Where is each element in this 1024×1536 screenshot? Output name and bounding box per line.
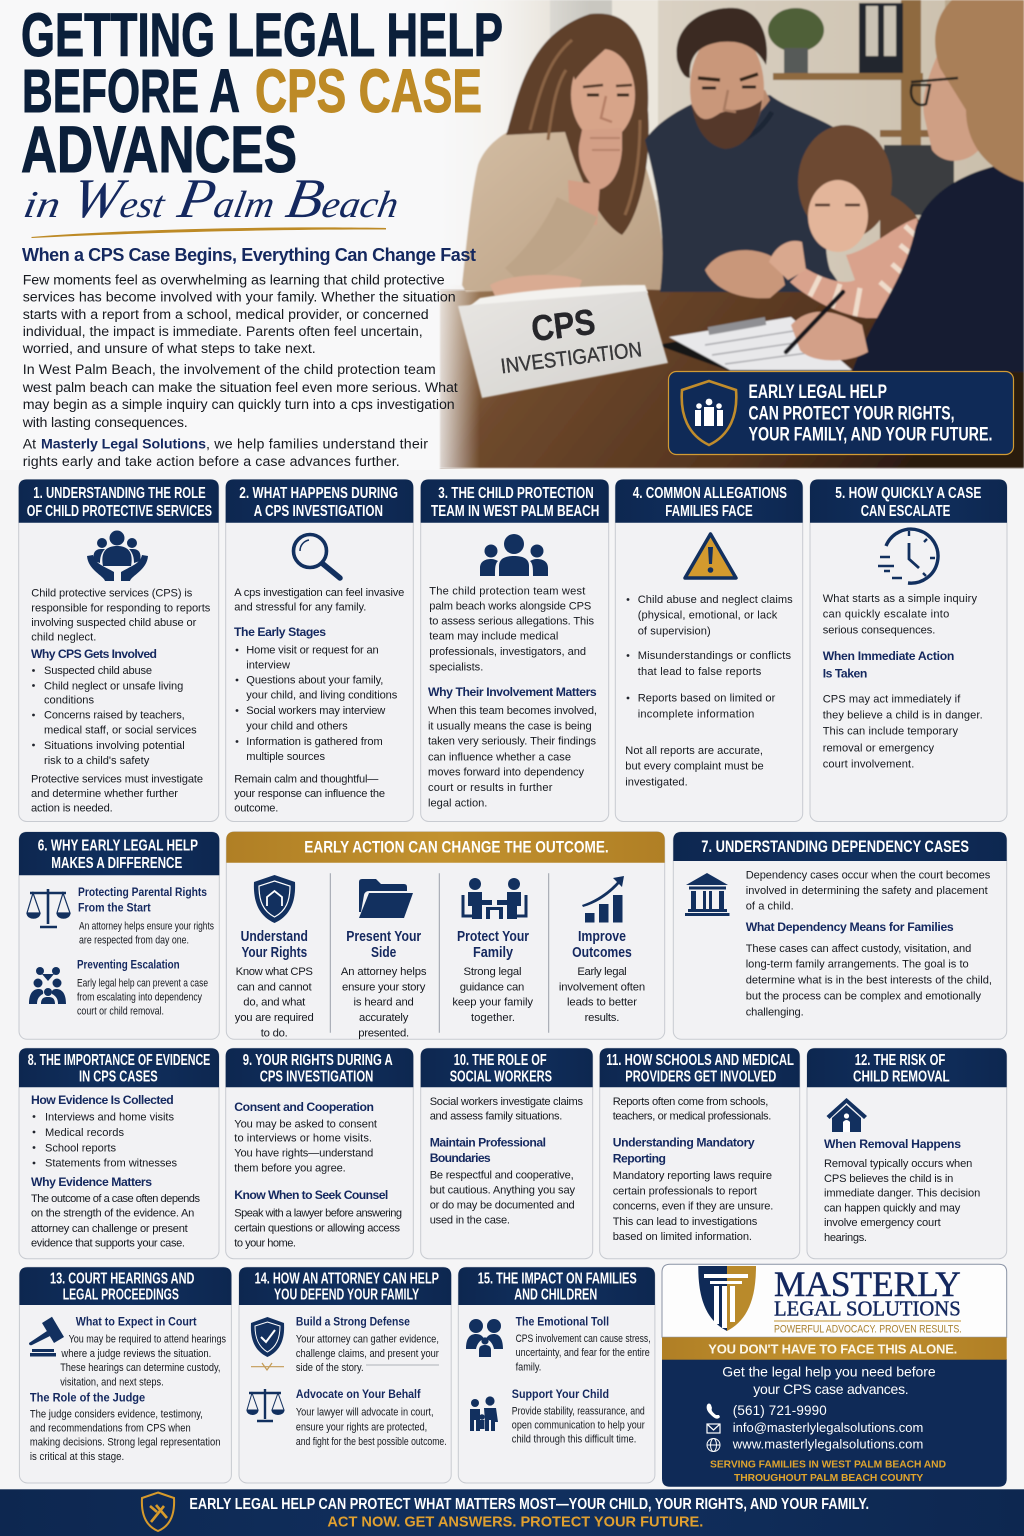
column: understand your rights: Your Rights — [241, 945, 307, 961]
panel 5: how quickly a case can escalate: court involvement. — [823, 758, 914, 770]
panel 3: the child protection team: specialists. — [429, 661, 483, 673]
column: protect your family: Strong legal — [464, 966, 522, 978]
panel 3: the child protection team: legal action. — [428, 798, 487, 810]
icon: warning triangle — [685, 534, 736, 578]
panel 9: your rights during a CPS investigation: to your home. — [234, 1238, 296, 1250]
column: present your side: is heard and — [354, 997, 414, 1009]
panel 7: understanding dependency cases: challenging. — [746, 1006, 804, 1018]
panel 4: common allegations: Reports based on limited or — [638, 693, 776, 705]
panel 7: understanding dependency cases — [673, 832, 1007, 1039]
panel 7: understanding dependency cases: involved in determining the safety and placement — [746, 885, 988, 897]
intro text: worried, and unsure of what steps to take next. — [22, 341, 316, 357]
panel 4: common allegations: investigated. — [625, 777, 688, 789]
panel 13: court hearings and legal proceedings — [19, 1267, 231, 1483]
panel 9: your rights during a CPS investigation: CPS INVESTIGATION — [260, 1069, 373, 1086]
icon: courthouse — [685, 873, 730, 916]
panel 7: understanding dependency cases: determine what is in the best interests of the child, — [746, 975, 992, 987]
contact panel: Masterly Legal Solutions: info@masterlylegalsolutions.com — [733, 1420, 923, 1435]
panel 13: court hearings and legal proceedings: The Role of the Judge — [30, 1391, 145, 1405]
contact panel: Masterly Legal Solutions: Get the legal help you need before — [722, 1364, 936, 1380]
panel 4: common allegations: 4. COMMON ALLEGATIONS — [633, 485, 787, 502]
panel 10: the role of social workers: and assess family situations. — [430, 1111, 562, 1123]
panel 5: how quickly a case can escalate: serious consequences. — [823, 625, 935, 637]
panel 10: the role of social workers: SOCIAL WORKERS — [450, 1069, 552, 1086]
panel 15: the impact on families and children — [458, 1267, 655, 1483]
panel 10: the role of social workers: used in the case. — [430, 1215, 510, 1227]
panel 1: understanding the role of CPS: 1. UNDERSTANDING THE ROLE — [33, 485, 206, 502]
panel 4: common allegations — [615, 480, 803, 822]
hero photo: worried family meeting an attorney at a table — [430, 0, 1024, 468]
panel 9: your rights during a CPS investigation: Consent and Cooperation — [234, 1100, 374, 1114]
icon: shield with family — [682, 381, 736, 445]
title: GETTING LEGAL HELP — [21, 1, 503, 69]
panel 6: why early legal help makes a difference: 6. WHY EARLY LEGAL HELP — [38, 837, 198, 854]
panel 6: why early legal help makes a difference: Early legal help can prevent a case — [77, 978, 208, 990]
intro text: west palm beach can make the situation feel even more serious. What — [22, 380, 458, 396]
panel 11: how schools and medical providers get involved: teachers, or medical professionals. — [613, 1111, 771, 1123]
intro text: services has become involved with your family. Whether the situation — [23, 290, 456, 306]
panel 1: understanding the role of CPS: action is needed. — [31, 803, 113, 815]
panel 2: what happens during a CPS investigation: interview — [246, 660, 291, 672]
panel 9: your rights during a CPS investigation: certain questions or allowing access — [234, 1223, 400, 1235]
panel 1: understanding the role of CPS: Child neglect or unsafe living — [44, 680, 183, 692]
panel 12: the risk of child removal: When Removal Happens — [824, 1137, 961, 1151]
panel 8: the importance of evidence: evidence that supports your case. — [31, 1238, 185, 1250]
panel 4: common allegations: that lead to false reports — [638, 666, 762, 678]
contact panel: Masterly Legal Solutions: (561) 721-9990 — [733, 1403, 827, 1418]
column: understand your rights: to do. — [261, 1027, 288, 1039]
panel 8: the importance of evidence: on the strength of the evidence. An — [31, 1208, 194, 1220]
panel 3: the child protection team — [421, 480, 609, 822]
script subtitle: in West Palm Beach: Beach — [282, 168, 405, 230]
title: BEFORE A — [22, 57, 240, 125]
panel 13: court hearings and legal proceedings: 13. COURT HEARINGS AND — [50, 1270, 194, 1287]
icon: house with child — [826, 1098, 867, 1132]
contact panel: Masterly Legal Solutions — [662, 1264, 1007, 1487]
panel 13: court hearings and legal proceedings: making decisions. Strong legal representation — [30, 1437, 221, 1449]
panel 1: understanding the role of CPS: Child protective services (CPS) is — [31, 588, 193, 600]
panel 13: court hearings and legal proceedings: where a judge reviews the situation. — [61, 1348, 211, 1360]
panel 10: the role of social workers: 10. THE ROLE OF — [454, 1052, 547, 1069]
panel 5: how quickly a case can escalate: CAN ESCALATE — [861, 503, 951, 520]
column: protect your family: Family — [473, 945, 513, 961]
panel 5: how quickly a case can escalate: This can include temporary — [823, 726, 958, 738]
panel 4: common allegations: but every complaint must be — [625, 761, 764, 773]
panel 2: what happens during a CPS investigation: A CPS INVESTIGATION — [254, 503, 383, 520]
column: protect your family: keep your family — [452, 997, 533, 1009]
panel 6: why early legal help makes a difference: from escalating into dependency — [77, 992, 202, 1004]
panel 8: the importance of evidence — [19, 1048, 219, 1259]
sign: CPS investigation: CPS — [529, 301, 597, 349]
panel 2: what happens during a CPS investigation: and stressful for any family. — [234, 602, 366, 614]
panel 2: what happens during a CPS investigation: outcome. — [234, 803, 278, 815]
icon: envelope — [707, 1424, 720, 1433]
title — [21, 1, 503, 186]
footer band: ACT NOW. GET ANSWERS. PROTECT YOUR FUTURE. — [327, 1514, 703, 1531]
contact panel: Masterly Legal Solutions: your CPS case advances. — [753, 1381, 909, 1397]
panel 4: common allegations: Misunderstandings or conflicts — [638, 650, 791, 662]
panel 8: the importance of evidence: Statements from witnesses — [45, 1158, 177, 1170]
panel 2: what happens during a CPS investigation: Social workers may interview — [246, 705, 386, 717]
panel 14: how an attorney can help: Build a Strong Defense — [296, 1315, 410, 1329]
panel 2: what happens during a CPS investigation: multiple sources — [246, 751, 325, 763]
column: present your side: Present Your — [346, 929, 422, 945]
panel 4: common allegations: (physical, emotional, or lack — [638, 610, 778, 622]
column: improve outcomes: Outcomes — [572, 945, 632, 961]
panel 1: understanding the role of CPS: Protective services must investigate — [31, 774, 203, 786]
panel 11: how schools and medical providers get involved: Reporting — [613, 1151, 666, 1165]
panel 7: understanding dependency cases: What Dependency Means for Families — [746, 920, 954, 934]
panel 12: the risk of child removal: Removal typically occurs when — [824, 1158, 972, 1170]
column: present your side — [341, 879, 427, 1039]
column: present your side: presented. — [358, 1027, 409, 1039]
panel 11: how schools and medical providers get involved: based on limited information. — [613, 1231, 752, 1243]
icon: gavel — [29, 1317, 64, 1356]
footer band — [0, 1489, 1024, 1536]
panel 13: court hearings and legal proceedings: visitation, and next steps. — [60, 1376, 164, 1388]
panel 3: the child protection team: professionals, investigators, and — [429, 646, 586, 658]
column: protect your family — [452, 878, 533, 1024]
panel 13: court hearings and legal proceedings: The judge considers evidence, testimony, — [30, 1408, 203, 1420]
icon: scales — [247, 1389, 284, 1421]
panel 1: understanding the role of CPS: Why CPS Gets Involved — [31, 647, 157, 661]
column: present your side: An attorney helps — [341, 966, 427, 978]
intro text: may begin as a simple inquiry can quickly turn into a cps investigation — [23, 397, 455, 413]
icon: globe — [707, 1438, 720, 1452]
panel 5: how quickly a case can escalate — [810, 480, 1007, 822]
sign: CPS investigation — [458, 285, 668, 398]
panel 1: understanding the role of CPS: Suspected child abuse — [44, 665, 152, 677]
logo wordmark: POWERFUL ADVOCACY. PROVEN RESULTS. — [774, 1323, 962, 1335]
panel 14: how an attorney can help — [239, 1267, 451, 1483]
icon: family group — [29, 967, 66, 1004]
panel 2: what happens during a CPS investigation: 2. WHAT HAPPENS DURING — [239, 485, 398, 502]
panel 4: common allegations: Not all reports are accurate, — [625, 745, 763, 757]
panel 1: understanding the role of CPS: responsible for responding to reports — [31, 602, 211, 614]
panel 11: how schools and medical providers get involved: Understanding Mandatory — [613, 1136, 755, 1150]
panel 3: the child protection team: 3. THE CHILD PROTECTION — [438, 485, 594, 502]
panel 2: what happens during a CPS investigation — [226, 480, 413, 822]
panel 6: why early legal help makes a difference: From the Start — [78, 901, 151, 915]
panel 9: your rights during a CPS investigation: to interviews or home visits. — [234, 1133, 372, 1145]
panel 15: the impact on families and children: Provide stability, reassurance, and — [512, 1405, 645, 1417]
panel 14: how an attorney can help: 14. HOW AN ATTORNEY CAN HELP — [255, 1270, 439, 1287]
icon: footer shield with gavel — [142, 1492, 174, 1531]
panel 3: the child protection team: When this team becomes involved, — [428, 705, 597, 717]
panel 6: why early legal help makes a difference: are respected from day one. — [79, 935, 189, 947]
panel 3: the child protection team: to assess serious allegations. This — [429, 616, 594, 628]
panel 12: the risk of child removal: hearings. — [824, 1232, 867, 1244]
icon: shield with check — [251, 1317, 284, 1357]
panel 8: the importance of evidence: Medical records — [45, 1127, 124, 1139]
title: ADVANCES — [21, 112, 297, 186]
footer band: EARLY LEGAL HELP CAN PROTECT WHAT MATTERS MOST—YOUR CHILD, YOUR RIGHTS, AND YOUR FAMILY. — [189, 1496, 869, 1513]
panel 7: understanding dependency cases: Dependency cases occur when the court becomes — [746, 869, 991, 881]
panel 14: how an attorney can help: Your attorney can gather evidence, — [296, 1334, 439, 1346]
panel 6: why early legal help makes a difference: Protecting Parental Rights — [78, 885, 207, 899]
column: present your side: accurately — [359, 1012, 409, 1024]
panel 10: the role of social workers: Social workers investigate claims — [430, 1096, 583, 1108]
panel 12: the risk of child removal: CHILD REMOVAL — [853, 1069, 950, 1086]
logo wordmark: MASTERLY — [774, 1264, 961, 1304]
script subtitle: in West Palm Beach: in — [20, 184, 64, 226]
panel 8: the importance of evidence: Interviews and home visits — [45, 1111, 174, 1123]
panel 10: the role of social workers: or do may be documented and — [430, 1200, 575, 1212]
panel 13: court hearings and legal proceedings: What to Expect in Court — [76, 1315, 197, 1329]
contact panel: Masterly Legal Solutions: THROUGHOUT PALM BEACH COUNTY — [734, 1473, 923, 1484]
panel 3: the child protection team: The child protection team west — [429, 585, 585, 597]
panel 12: the risk of child removal: 12. THE RISK OF — [855, 1052, 945, 1069]
icon: rising bar chart — [582, 876, 624, 922]
panel 8: the importance of evidence: IN CPS CASES — [79, 1069, 158, 1086]
panel 5: how quickly a case can escalate: When Immediate Action — [823, 649, 954, 663]
panel 11: how schools and medical providers get involved: 11. HOW SCHOOLS AND MEDICAL — [606, 1052, 794, 1069]
panel 15: the impact on families and children: family. — [516, 1361, 541, 1373]
panel 15: the impact on families and children: open communication to help your — [512, 1419, 645, 1431]
panel 9: your rights during a CPS investigation: Know When to Seek Counsel — [234, 1188, 388, 1202]
panel 13: court hearings and legal proceedings: is critical at this stage. — [30, 1451, 124, 1463]
column: improve outcomes: Improve — [578, 929, 626, 945]
intro text: , we help families understand their — [206, 436, 428, 452]
panel 2: what happens during a CPS investigation: Questions about your family, — [246, 675, 383, 687]
intro text: individual, the impact is immediate. Parents often feel uncertain, — [23, 324, 423, 340]
panel 1: understanding the role of CPS: medical staff, or social services — [44, 725, 197, 737]
panel 15: the impact on families and children: The Emotional Toll — [516, 1315, 609, 1329]
panel 8: the importance of evidence: attorney can challenge or present — [31, 1223, 188, 1235]
contact panel: Masterly Legal Solutions: SERVING FAMILIES IN WEST PALM BEACH AND — [710, 1459, 946, 1470]
panel 9: your rights during a CPS investigation: You have rights—understand — [234, 1148, 373, 1160]
intro text: rights early and take action before a case advances further. — [23, 454, 400, 470]
contact panel: Masterly Legal Solutions: www.masterlylegalsolutions.com — [732, 1437, 923, 1452]
panel 12: the risk of child removal: immediate danger. This decision — [824, 1188, 980, 1200]
column: improve outcomes: Early legal — [577, 966, 627, 978]
column: protect your family: guidance can — [460, 981, 524, 993]
column: protect your family: together. — [471, 1012, 515, 1024]
panel 1: understanding the role of CPS: child neglect. — [31, 632, 96, 644]
panel 7: understanding dependency cases: but the process can be complex and emotionally — [746, 990, 981, 1002]
panel 14: how an attorney can help: ensure your rights are protected, — [296, 1421, 427, 1433]
panel 11: how schools and medical providers get involved: Reports often come from schools, — [613, 1096, 768, 1108]
icon: shield with home — [254, 875, 295, 923]
panel 11: how schools and medical providers get involved: This can lead to investigations — [613, 1216, 758, 1228]
intro heading: When a CPS Case Begins, Everything Can Change Fast — [22, 245, 476, 265]
panel 15: the impact on families and children: uncertainty, and fear for the entire — [516, 1347, 650, 1359]
panel 9: your rights during a CPS investigation — [226, 1048, 413, 1259]
icon: magnifying glass — [294, 534, 340, 578]
panel 14: how an attorney can help: and fight for the best possible outcome. — [296, 1436, 447, 1448]
panel 3: the child protection team: Why Their Involvement Matters — [428, 685, 597, 699]
icon: family embrace — [466, 1319, 503, 1357]
column: improve outcomes: leads to better — [567, 997, 637, 1009]
panel 10: the role of social workers: but cautious. Anything you say — [430, 1184, 575, 1196]
panel 9: your rights during a CPS investigation: 9. YOUR RIGHTS DURING A — [243, 1052, 393, 1069]
panel 15: the impact on families and children: AND CHILDREN — [514, 1287, 597, 1304]
panel 14: how an attorney can help: Advocate on Your Behalf — [296, 1387, 421, 1401]
panel 12: the risk of child removal: involve emergency court — [824, 1217, 941, 1229]
script subtitle: in West Palm Beach: West — [68, 168, 172, 230]
panel 3: the child protection team: TEAM IN WEST PALM BEACH — [431, 503, 599, 520]
panel 6: why early legal help makes a difference: MAKES A DIFFERENCE — [51, 855, 183, 872]
panel 5: how quickly a case can escalate: can quickly escalate into — [823, 609, 949, 621]
panel 10: the role of social workers — [421, 1048, 593, 1259]
panel 5: how quickly a case can escalate: removal or emergency — [823, 742, 934, 754]
callout: early legal help: EARLY LEGAL HELP — [748, 382, 887, 403]
panel 15: the impact on families and children: Support Your Child — [512, 1387, 609, 1401]
panel 4: common allegations: Child abuse and neglect claims — [638, 594, 793, 606]
panel 2: what happens during a CPS investigation: Remain calm and thoughtful— — [234, 774, 379, 786]
icon: phone — [707, 1404, 720, 1419]
panel 3: the child protection team: can influence whether a case — [428, 751, 571, 763]
panel 3: the child protection team: court or results in further — [428, 782, 553, 794]
panel 6: why early legal help makes a difference: Preventing Escalation — [77, 958, 180, 972]
column: understand your rights: do, and what — [243, 997, 306, 1009]
panel 7: understanding dependency cases: long-term family arrangements. The goal is to — [746, 959, 969, 971]
column: understand your rights: you are required — [235, 1012, 314, 1024]
panel 7: understanding dependency cases: These cases can affect custody, visitation, and — [746, 943, 971, 955]
panel 6: why early legal help makes a difference: court or child removal. — [77, 1006, 164, 1018]
callout: early legal help — [668, 372, 1014, 454]
panel 2: what happens during a CPS investigation: A cps investigation can feel invasive — [234, 587, 404, 599]
panel 5: how quickly a case can escalate: CPS may act immediately if — [823, 694, 961, 706]
intro text: Few moments feel as overwhelming as learning that child protective — [23, 272, 445, 288]
script subtitle: in West Palm Beach: Palm — [173, 168, 281, 230]
panel 2: what happens during a CPS investigation: The Early Stages — [234, 625, 326, 639]
panel 13: court hearings and legal proceedings: LEGAL PROCEEDINGS — [63, 1287, 179, 1304]
icon: clock with speed lines — [878, 529, 938, 583]
column: understand your rights: Understand — [241, 929, 308, 945]
intro text — [22, 272, 458, 470]
intro text: Masterly Legal Solutions — [41, 436, 206, 452]
panel 10: the role of social workers: Be respectful and cooperative, — [430, 1170, 574, 1182]
logo shield with column — [698, 1266, 756, 1331]
panel 2: what happens during a CPS investigation: your response can influence the — [234, 788, 385, 800]
intro text: In West Palm Beach, the involvement of the child protection team — [23, 362, 436, 378]
panel 12: the risk of child removal: CPS believes the child is in — [824, 1173, 953, 1185]
panel 1: understanding the role of CPS: involving suspected child abuse or — [31, 617, 197, 629]
panel 3: the child protection team: team may include medical — [429, 631, 558, 643]
panel 14: how an attorney can help: YOU DEFEND YOUR FAMILY — [274, 1287, 419, 1304]
icon: group of people — [480, 534, 548, 576]
panel 15: the impact on families and children: child through this difficult time. — [512, 1433, 636, 1445]
panel 3: the child protection team: it usually means the case is being — [428, 720, 592, 732]
column: improve outcomes — [559, 876, 645, 1024]
callout: early legal help: CAN PROTECT YOUR RIGHTS, — [748, 403, 954, 424]
panel 6: why early legal help makes a difference: An attorney helps ensure your rights — [79, 920, 214, 932]
panel 14: how an attorney can help: challenge claims, and present your — [296, 1348, 439, 1360]
intro text: starts with a report from a school, medical provider, or concerned — [23, 307, 429, 323]
panel 9: your rights during a CPS investigation: them before you agree. — [234, 1163, 346, 1175]
panel 14: how an attorney can help: Your lawyer will advocate in court, — [296, 1407, 434, 1419]
panel 11: how schools and medical providers get involved — [600, 1048, 800, 1259]
column: understand your rights: can and cannot — [237, 981, 313, 993]
panel 13: court hearings and legal proceedings: and recommendations from CPS when — [30, 1422, 191, 1434]
title: CPS CASE — [255, 57, 482, 125]
panel 13: court hearings and legal proceedings: You may be required to attend hearings — [69, 1334, 226, 1346]
panel 14: how an attorney can help: side of the story. — [296, 1362, 364, 1374]
logo wordmark: LEGAL SOLUTIONS — [774, 1296, 961, 1320]
panel 1: understanding the role of CPS: Concerns raised by teachers, — [44, 710, 185, 722]
panel 9: your rights during a CPS investigation: Speak with a lawyer before answering — [234, 1208, 402, 1220]
panel 1: understanding the role of CPS: Situations involving potential — [44, 740, 185, 752]
panel 8: the importance of evidence: How Evidence Is Collected — [31, 1093, 174, 1107]
script subtitle: in West Palm Beach — [20, 168, 405, 238]
panel 1: understanding the role of CPS: OF CHILD PROTECTIVE SERVICES — [27, 503, 212, 520]
panel 3: the child protection team: taken very seriously. Their findings — [428, 736, 596, 748]
panel 1: understanding the role of CPS: and determine whether further — [31, 788, 178, 800]
panel 8: the importance of evidence: School reports — [45, 1142, 116, 1154]
icon: scales of justice — [27, 889, 70, 927]
column: improve outcomes: involvement often — [559, 981, 645, 993]
panel 1: understanding the role of CPS — [19, 480, 219, 822]
intro text: At — [23, 436, 36, 452]
panel 8: the importance of evidence: The outcome of a case often depends — [31, 1193, 200, 1205]
panel 2: what happens during a CPS investigation: Information is gathered from — [246, 736, 383, 748]
panel 11: how schools and medical providers get involved: concerns, even if they are unsure. — [613, 1201, 773, 1213]
panel 11: how schools and medical providers get involved: Mandatory reporting laws require — [613, 1170, 772, 1182]
column: present your side: ensure your story — [342, 981, 426, 993]
panel 5: how quickly a case can escalate: Is Taken — [823, 666, 867, 680]
panel 7: understanding dependency cases: of a child. — [746, 901, 794, 913]
panel 13: court hearings and legal proceedings: These hearings can determine custody, — [60, 1362, 221, 1374]
panel 10: the role of social workers: Maintain Professional — [430, 1135, 546, 1149]
icon: parent holding child's hand — [470, 1396, 498, 1431]
panel 11: how schools and medical providers get involved: PROVIDERS GET INVOLVED — [625, 1069, 776, 1086]
panel 4: common allegations: incomplete information — [638, 709, 754, 721]
panel: early action can change the outcome — [226, 832, 665, 1039]
sign: CPS investigation: INVESTIGATION — [499, 338, 643, 378]
panel 10: the role of social workers: Boundaries — [430, 1151, 491, 1165]
contact panel: Masterly Legal Solutions: YOU DON'T HAVE TO FACE THIS ALONE. — [708, 1341, 957, 1356]
column: protect your family: Protect Your — [457, 929, 529, 945]
panel 2: what happens during a CPS investigation: your child and others — [246, 720, 348, 732]
panel 5: how quickly a case can escalate: What starts as a simple inquiry — [823, 593, 977, 605]
panel 5: how quickly a case can escalate: they believe a child is in danger. — [823, 710, 983, 722]
panel: early action can change the outcome: EARLY ACTION CAN CHANGE THE OUTCOME. — [304, 838, 609, 857]
panel 4: common allegations: FAMILIES FACE — [665, 503, 753, 520]
panel 12: the risk of child removal: can happen quickly and may — [824, 1202, 961, 1214]
panel 1: understanding the role of CPS: conditions — [44, 695, 94, 707]
panel 12: the risk of child removal — [807, 1048, 1007, 1259]
panel 15: the impact on families and children: CPS involvement can cause stress, — [516, 1333, 651, 1345]
column: understand your rights — [235, 875, 314, 1039]
logo wordmark — [774, 1264, 962, 1335]
panel 3: the child protection team: palm beach works alongside CPS — [429, 600, 591, 612]
panel 11: how schools and medical providers get involved: certain professionals to report — [613, 1185, 757, 1197]
icon: family in hands — [87, 530, 148, 581]
panel 8: the importance of evidence: 8. THE IMPORTANCE OF EVIDENCE — [28, 1052, 211, 1069]
column: understand your rights: Know what CPS — [236, 966, 313, 978]
panel 8: the importance of evidence: Why Evidence Matters — [31, 1175, 152, 1189]
column: present your side: Side — [371, 945, 396, 961]
column: improve outcomes: results. — [585, 1012, 619, 1024]
panel 3: the child protection team: moves forward into dependency — [428, 767, 584, 779]
panel 9: your rights during a CPS investigation: You may be asked to consent — [234, 1118, 377, 1130]
icon: folder — [359, 879, 413, 918]
panel 4: common allegations: of supervision) — [638, 626, 711, 638]
intro text: with lasting consequences. — [22, 415, 188, 431]
panel 6: why early legal help makes a difference — [19, 832, 219, 1039]
panel 15: the impact on families and children: 15. THE IMPACT ON FAMILIES — [478, 1270, 637, 1287]
panel 2: what happens during a CPS investigation: your child, and living conditions — [246, 690, 398, 702]
icon: people at a table — [463, 878, 526, 919]
panel 2: what happens during a CPS investigation: Home visit or request for an — [246, 645, 379, 657]
panel 1: understanding the role of CPS: risk to a child's safety — [44, 755, 150, 767]
